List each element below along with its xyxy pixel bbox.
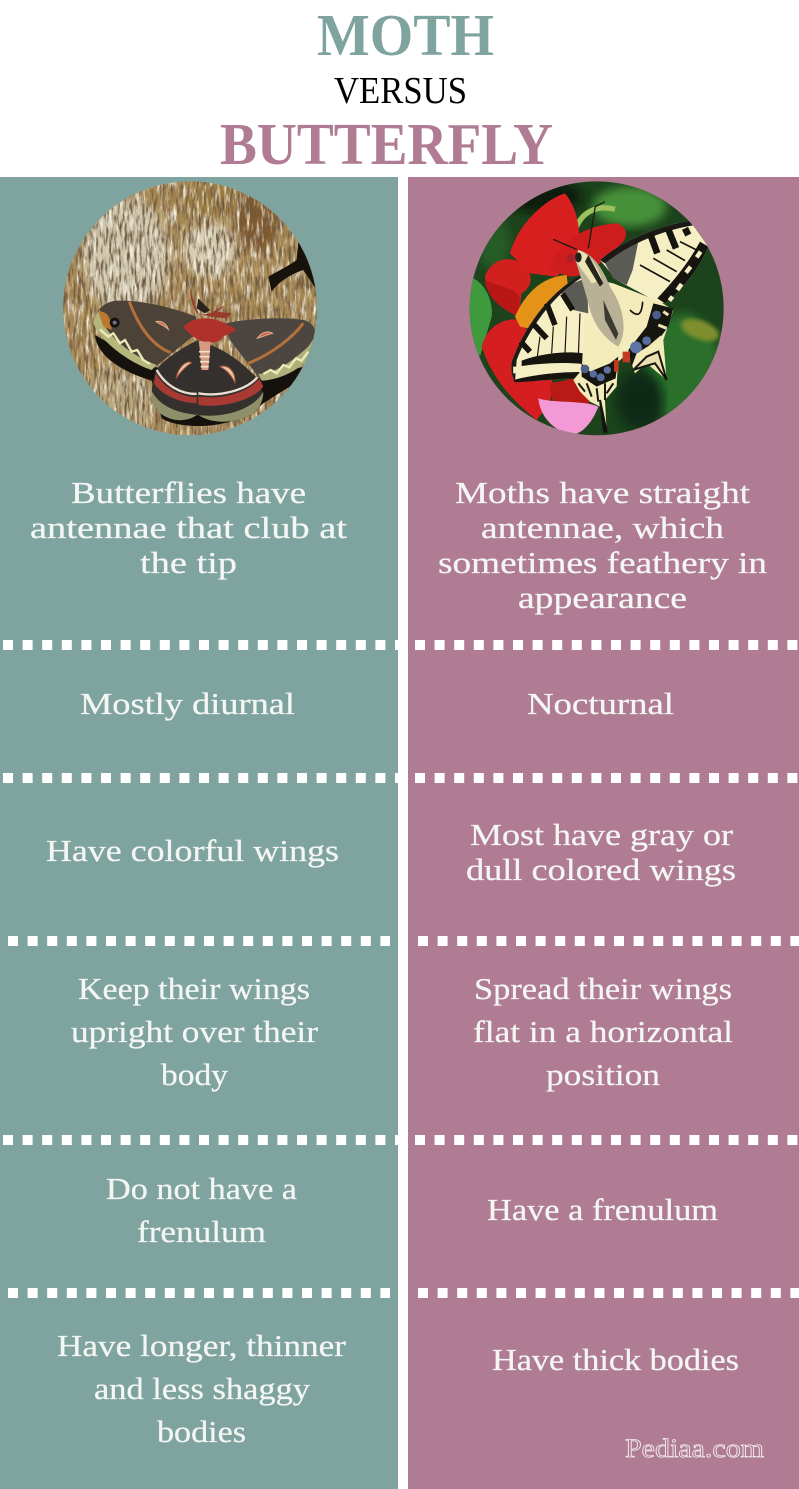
red petals [510,193,579,277]
text: moth activity: Mostly diurnal [80,686,295,721]
text: moth antennae: antennae that club at [30,510,347,545]
photo: moth on bark [60,178,320,438]
text: butterfly frenulum: Have a frenulum [487,1192,718,1227]
upper right wing [600,221,708,303]
text: moth antennae: Butterflies have [71,475,306,510]
text: butterfly antennae: Moths have straight [455,475,750,510]
title: Butterfly: BUTTERFLY [220,111,553,177]
text: moth wing posture: Keep their wings [78,971,310,1006]
text: butterfly wing posture: flat in a horizontal [473,1014,733,1049]
body [190,288,232,318]
text: moth body [57,1328,347,1449]
forewing left [93,301,197,370]
text: moth body: bodies [157,1414,246,1449]
left forewing [511,273,590,382]
text: butterfly antennae: sometimes feathery in [438,545,768,580]
text: butterfly antennae: appearance [518,580,687,615]
text: moth frenulum [106,1171,297,1249]
title: versus: VERSUS [334,70,467,112]
watermark: Pediaa.com: Pediaa.com [625,1434,764,1463]
text: moth antennae: the tip [140,545,237,580]
right hindwing [613,283,673,380]
text: butterfly wing colour: dull colored wings [466,852,736,887]
text: butterfly wing posture: position [546,1057,661,1092]
text: butterfly wing posture: Spread their wings [474,971,732,1006]
body [575,250,624,347]
hindwing left [152,340,202,420]
photo: butterfly on red flower [467,178,727,438]
text: moth body: Have longer, thinner [57,1328,347,1363]
body fill backing [588,282,628,362]
hindwing right [198,343,262,421]
text: butterfly antennae [438,475,768,615]
text: moth antennae [30,475,347,580]
text: moth body: and less shaggy [94,1371,311,1406]
shadow [95,335,303,426]
panel: butterfly column [408,177,799,1489]
text: butterfly body: Have thick bodies [492,1342,739,1377]
text: moth wing posture: body [161,1057,229,1092]
text: butterfly antennae: antennae, which [481,510,725,545]
text: moth wing posture: upright over their [71,1014,319,1049]
text: moth frenulum: frenulum [137,1214,266,1249]
text: butterfly wing posture [473,971,733,1092]
text: butterfly wing colour: Most have gray or [470,817,734,852]
text: butterfly activity: Nocturnal [527,686,674,721]
text: butterfly wing colour [466,817,736,887]
left hindwing [573,313,618,432]
text: moth frenulum: Do not have a [106,1171,297,1206]
text: moth wing posture [71,971,319,1092]
forewing right [225,318,315,381]
panel: moth column [0,177,398,1489]
text: moth wing colour: Have colorful wings [46,833,339,868]
title: Moth: MOTH [317,2,494,68]
